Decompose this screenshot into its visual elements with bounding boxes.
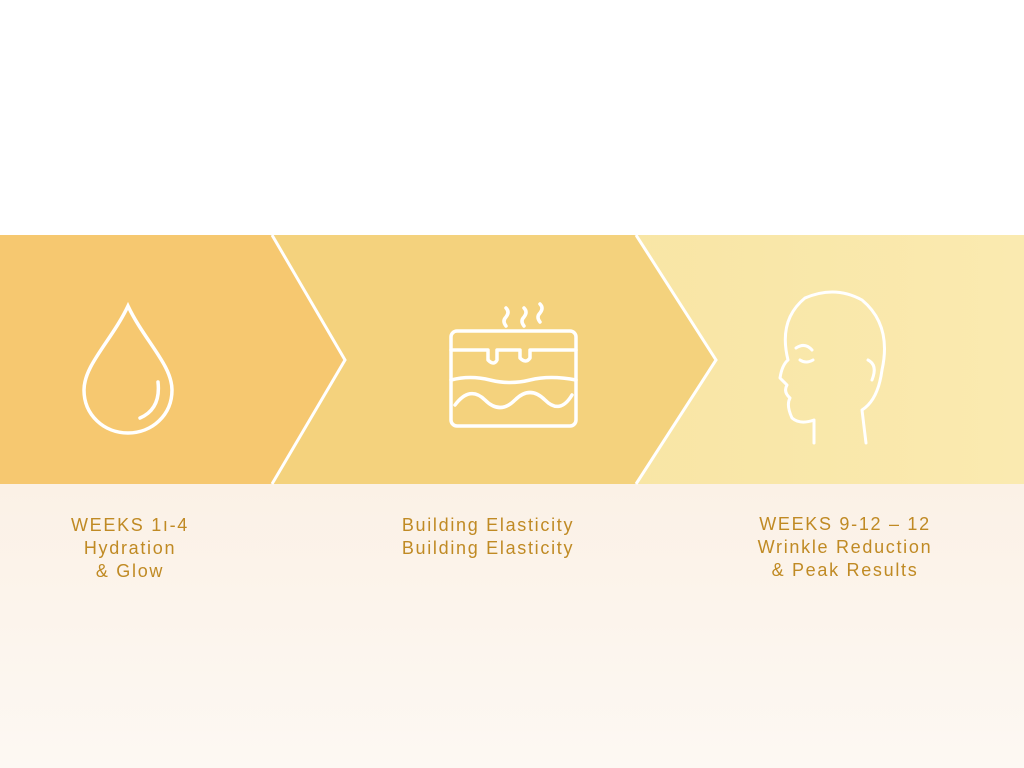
text: weeks 9-12: WEEKS 9-12 – 12 [759, 514, 931, 534]
text: building elasticity [402, 515, 574, 558]
icon: water drop [84, 306, 172, 433]
text: weeks 9-12: & Peak Results [772, 560, 918, 580]
icon: layered cake [451, 304, 576, 426]
text: weeks 1-4: & Glow [96, 561, 164, 581]
text: weeks 1-4: WEEKS 1ı-4 [71, 515, 189, 535]
text: weeks 1-4 [71, 515, 189, 581]
text: weeks 9-12: Wrinkle Reduction [758, 537, 932, 557]
text: weeks 1-4: Hydration [84, 538, 176, 558]
text: weeks 9-12 [758, 514, 932, 580]
text: building elasticity: Building Elasticity [402, 515, 574, 535]
icon: face profile [780, 292, 884, 443]
text: building elasticity: Building Elasticity [402, 538, 574, 558]
